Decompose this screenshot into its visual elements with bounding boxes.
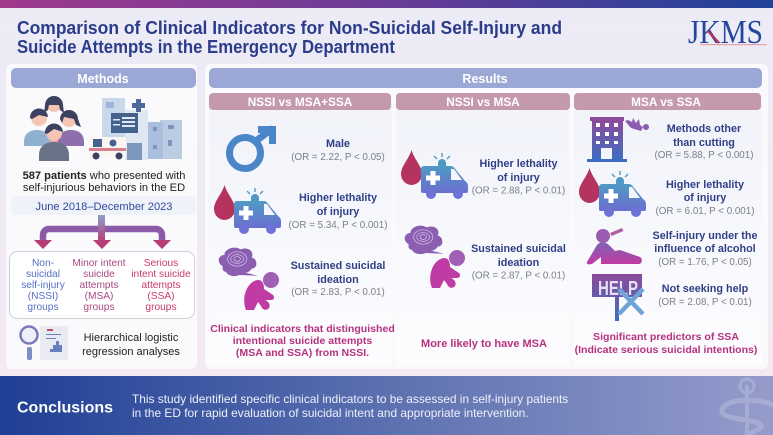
SSA group: (SSA) xyxy=(147,291,175,302)
ideation text: (OR = 2.83, P < 0.01) xyxy=(291,287,385,298)
icon: help crossed out: HELP xyxy=(598,278,638,300)
lethality text xyxy=(472,158,565,196)
ideation text xyxy=(471,243,566,282)
NSSI group: self-injury xyxy=(21,280,66,291)
icon: blood and ambulance xyxy=(401,150,468,199)
results heading xyxy=(209,68,762,88)
methods text: Methods other xyxy=(667,123,742,135)
regression text: regression analyses xyxy=(82,346,180,358)
patients text: self-injurious behaviors in the ED xyxy=(23,182,185,194)
arrows: three groups xyxy=(34,215,171,249)
MSA group: suicide xyxy=(83,269,115,280)
lethality text xyxy=(656,179,754,217)
conclusions text: in the ED for rapid evaluation of suicidal intent and appropriate intervention. xyxy=(132,406,529,420)
column: NSSI vs MSA xyxy=(396,93,570,365)
ideation text: ideation xyxy=(498,257,539,269)
column heading: NSSI vs MSA xyxy=(446,95,520,109)
NSSI group xyxy=(21,258,66,313)
MSA group: attempts xyxy=(79,280,119,291)
lethality text: (OR = 2.88, P < 0.01) xyxy=(472,186,565,196)
male text: (OR = 2.22, P < 0.05) xyxy=(291,152,385,163)
icon: help crossed out xyxy=(592,274,643,321)
conclusion text: intentional suicide attempts xyxy=(233,335,372,347)
methods text xyxy=(655,123,753,161)
help text: Not seeking help xyxy=(662,283,749,295)
conclusion text: More likely to have MSA xyxy=(421,338,547,350)
conclusion text: Clinical indicators that distinguished xyxy=(210,323,395,335)
icon: patients group xyxy=(24,96,84,161)
column heading: NSSI vs MSA+SSA xyxy=(248,95,353,109)
MSA group: Minor intent xyxy=(72,258,126,269)
results heading: Results xyxy=(462,72,508,86)
male text xyxy=(291,138,385,163)
conclusion text: (Indicate serious suicidal intentions) xyxy=(575,344,757,356)
icon: building and fall xyxy=(587,117,649,162)
alcohol text: Self-injury under the xyxy=(653,230,757,242)
icon: caduceus watermark xyxy=(722,379,773,435)
lethality text: Higher lethality xyxy=(299,192,377,204)
logo: JKMS: JKMS xyxy=(688,14,763,51)
date range: June 2018–December 2023 xyxy=(36,201,172,213)
NSSI group: Non- xyxy=(32,258,54,269)
title xyxy=(17,18,562,57)
lethality text: (OR = 6.01, P < 0.001) xyxy=(656,206,754,217)
methods heading: Methods xyxy=(77,72,129,86)
regression text xyxy=(82,332,180,358)
icon: drinking person xyxy=(587,228,642,264)
icon: suicidal ideation xyxy=(219,248,279,310)
MSA group: (MSA) xyxy=(85,291,113,302)
regression text: Hierarchical logistic xyxy=(84,332,179,344)
conclusion text: (MSA and SSA) from NSSI. xyxy=(236,347,369,359)
icon: male symbol xyxy=(230,128,273,168)
ideation text: Sustained suicidal xyxy=(471,243,566,255)
band: conclusions xyxy=(0,376,773,435)
conclusion text: Significant predictors of SSA xyxy=(593,331,739,343)
lethality text: of injury xyxy=(497,172,540,184)
ideation text: (OR = 2.87, P < 0.01) xyxy=(472,270,565,282)
help text xyxy=(658,283,752,308)
SSA group: intent suicide xyxy=(131,269,191,280)
conclusions text: This study identified specific clinical indicators to be assessed in self-injury patients xyxy=(132,392,568,406)
conclusions text xyxy=(132,392,568,420)
icon: hospital and ambulance xyxy=(89,98,182,160)
icon: blood and ambulance xyxy=(214,185,281,234)
top accent bar xyxy=(0,0,773,8)
column heading xyxy=(396,93,570,110)
column heading xyxy=(209,93,391,110)
panel: methods xyxy=(6,64,197,369)
SSA group: groups xyxy=(145,302,177,313)
icon: magnifier and report xyxy=(20,326,68,360)
patients text xyxy=(23,170,185,194)
alcohol text: (OR = 1.76, P < 0.05) xyxy=(658,257,752,268)
SSA group xyxy=(131,258,191,313)
lethality text xyxy=(289,192,387,231)
ideation text xyxy=(291,260,385,298)
title: Suicide Attempts in the Emergency Department xyxy=(17,37,395,57)
groups box xyxy=(10,252,194,318)
column heading: MSA vs SSA xyxy=(631,95,701,109)
lethality text: (OR = 5.34, P < 0.001) xyxy=(289,220,387,231)
patients text: 587 patients who presented with xyxy=(23,170,185,182)
help text: (OR = 2.08, P < 0.01) xyxy=(658,297,752,308)
conclusion text xyxy=(575,331,757,356)
ideation text: Sustained suicidal xyxy=(291,260,385,272)
title: Comparison of Clinical Indicators for Non-Suicidal Self-Injury and xyxy=(17,18,562,38)
ideation text: ideation xyxy=(317,274,359,286)
male text: Male xyxy=(326,138,350,150)
column: NSSI vs MSA+SSA xyxy=(209,93,395,365)
MSA group xyxy=(72,258,126,313)
NSSI group: groups xyxy=(27,302,59,313)
column: MSA vs SSA xyxy=(574,93,762,365)
lethality text: of injury xyxy=(684,192,726,204)
lethality text: Higher lethality xyxy=(480,158,558,170)
panel: results xyxy=(205,64,768,369)
date range xyxy=(11,196,196,215)
alcohol text: influence of alcohol xyxy=(654,243,756,255)
lethality text: Higher lethality xyxy=(666,179,744,191)
SSA group: attempts xyxy=(141,280,181,291)
MSA group: groups xyxy=(83,302,115,313)
methods text: (OR = 5.88, P < 0.001) xyxy=(655,150,753,161)
column heading xyxy=(574,93,761,110)
icon: suicidal ideation xyxy=(405,226,465,288)
NSSI group: suicidal xyxy=(26,269,60,280)
icon: blood and ambulance xyxy=(579,168,646,217)
conclusions heading: Conclusions xyxy=(17,400,113,416)
SSA group: Serious xyxy=(144,258,178,269)
NSSI group: (NSSI) xyxy=(28,291,58,302)
alcohol text xyxy=(653,230,757,268)
methods text: than cutting xyxy=(673,137,735,149)
methods heading xyxy=(11,68,196,88)
conclusion text xyxy=(210,323,395,359)
lethality text: of injury xyxy=(317,206,359,218)
